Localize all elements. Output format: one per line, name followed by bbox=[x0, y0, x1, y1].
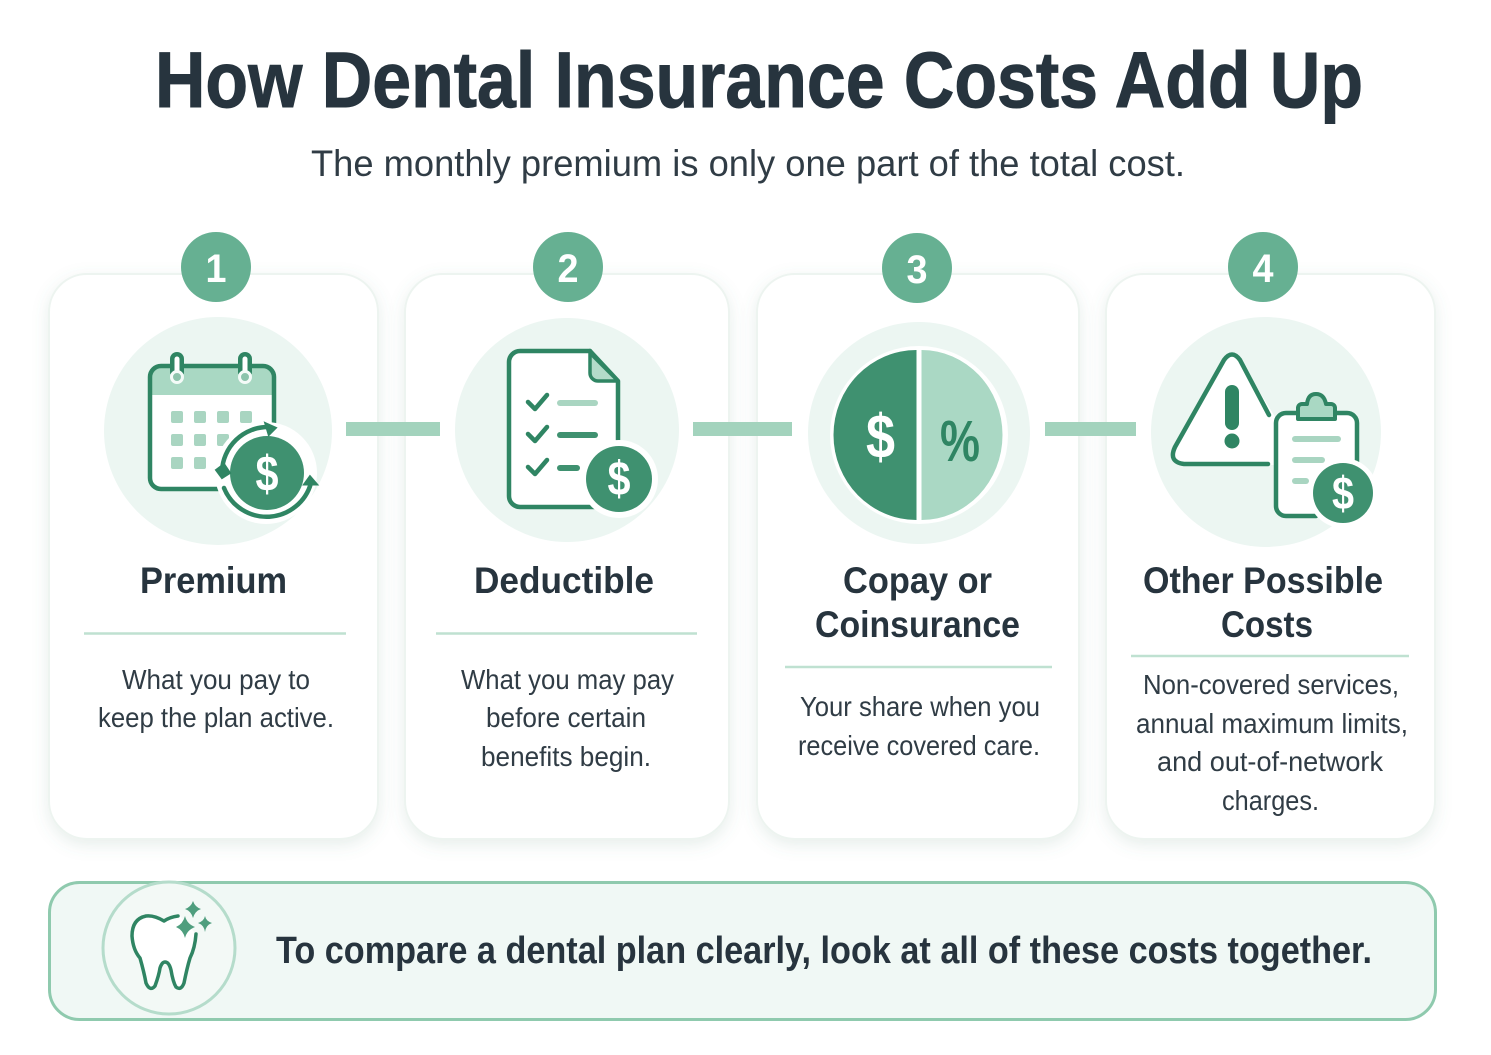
text: deductible description: before certain bbox=[486, 702, 646, 733]
text: copay description: receive covered care. bbox=[798, 730, 1040, 761]
text: copay description bbox=[798, 691, 1040, 761]
heading: copay or coinsurance bbox=[815, 559, 1020, 645]
icon: calendar with recurring dollar: $ bbox=[256, 446, 279, 502]
icon: checklist document with dollar bbox=[455, 318, 679, 542]
text: other costs description: Non-covered services, bbox=[1143, 669, 1399, 700]
icon: split dollar and percent circle bbox=[808, 322, 1030, 544]
heading: other possible costs: Other Possible bbox=[1143, 559, 1383, 601]
panel: premium bbox=[49, 232, 378, 839]
step badge 4 bbox=[1228, 232, 1298, 302]
text: premium description: What you pay to bbox=[122, 664, 310, 695]
panel: copay or coinsurance bbox=[757, 233, 1079, 839]
step badge 4: 4 bbox=[1252, 247, 1274, 291]
step badge 2: 2 bbox=[558, 247, 578, 291]
step badge 1: 1 bbox=[206, 247, 226, 291]
step badge 3: 3 bbox=[906, 248, 928, 292]
heading: other possible costs: Costs bbox=[1221, 603, 1313, 645]
heading: copay or coinsurance: Copay or bbox=[843, 559, 992, 601]
text: deductible description: benefits begin. bbox=[481, 741, 651, 772]
text: deductible description bbox=[461, 664, 674, 772]
icon: split dollar and percent circle: $ bbox=[866, 403, 895, 472]
heading: copay or coinsurance: Coinsurance bbox=[815, 603, 1020, 645]
connector 2 to 3 bbox=[693, 422, 792, 436]
text: deductible description: What you may pay bbox=[461, 664, 674, 695]
connector 1 to 2 bbox=[346, 422, 440, 436]
connector 3 to 4 bbox=[1045, 422, 1136, 436]
icon: split dollar and percent circle: % bbox=[940, 409, 980, 474]
step badge 3 bbox=[882, 233, 952, 303]
text: copay description: Your share when you bbox=[800, 691, 1040, 722]
text: other costs description bbox=[1136, 669, 1408, 816]
text: other costs description: and out-of-network bbox=[1157, 746, 1383, 777]
icon: calendar with recurring dollar bbox=[104, 317, 332, 545]
heading: deductible: Deductible bbox=[474, 559, 654, 601]
icon: warning triangle and clipboard with dollar: $ bbox=[1332, 467, 1354, 519]
icon: sparkling tooth bbox=[103, 882, 235, 1014]
callout: compare costs together bbox=[50, 882, 1436, 1020]
text: premium description: keep the plan active. bbox=[98, 702, 334, 733]
icon: warning triangle and clipboard with dollar bbox=[1151, 317, 1381, 547]
icon: checklist document with dollar: $ bbox=[608, 453, 631, 506]
text: premium description bbox=[98, 664, 334, 733]
subtitle: The monthly premium is only one part of the total cost. bbox=[311, 143, 1185, 184]
text: callout message: To compare a dental plan clearly, look at all of these costs together. bbox=[276, 930, 1372, 972]
text: other costs description: annual maximum limits, bbox=[1136, 708, 1408, 739]
step badge 1 bbox=[181, 232, 251, 302]
panel: other possible costs bbox=[1106, 232, 1435, 839]
title: How Dental Insurance Costs Add Up bbox=[155, 35, 1363, 124]
step badge 2 bbox=[533, 232, 603, 302]
heading: premium: Premium bbox=[140, 559, 287, 601]
heading: other possible costs bbox=[1143, 559, 1383, 645]
panel: deductible bbox=[405, 232, 729, 839]
text: other costs description: charges. bbox=[1222, 785, 1319, 816]
